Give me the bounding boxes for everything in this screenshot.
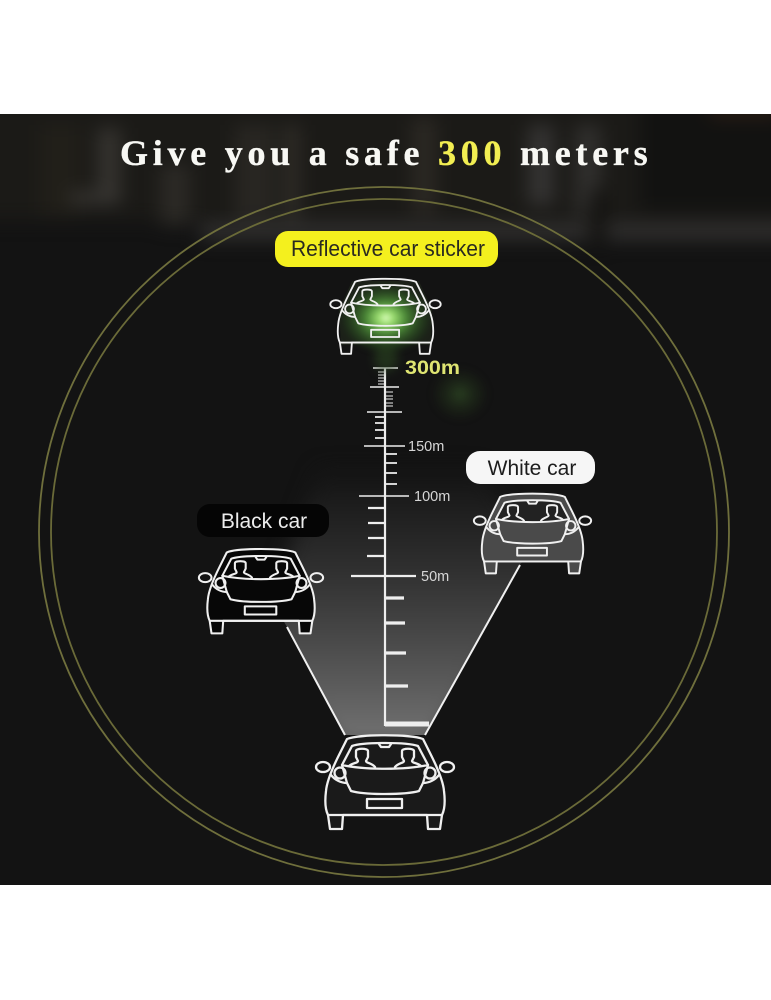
label: reflective car sticker [275, 231, 498, 267]
panel: night road background [0, 90, 771, 885]
car with reflective sticker [330, 279, 441, 372]
light cone from the viewer car [284, 500, 522, 736]
distance label: 50m: 50m [421, 569, 449, 585]
black car [199, 549, 323, 633]
label: white car: White car [488, 457, 576, 480]
viewer car at bottom [316, 735, 454, 829]
outer yellow ring [39, 187, 729, 877]
green flare [430, 366, 490, 422]
distance label: 100m: 100m [414, 489, 450, 505]
distance label: 150m: 150m [408, 439, 444, 455]
label: black car: Black car [221, 510, 307, 533]
white car [474, 494, 591, 573]
label: reflective car sticker: Reflective car sticker [291, 236, 485, 261]
label: white car [466, 451, 595, 484]
label: black car [197, 504, 329, 537]
inner yellow ring [51, 199, 717, 865]
distance ruler [351, 368, 429, 726]
distance label: 300m: 300m [405, 357, 460, 379]
title: Give you a safe 300 meters [120, 133, 652, 173]
